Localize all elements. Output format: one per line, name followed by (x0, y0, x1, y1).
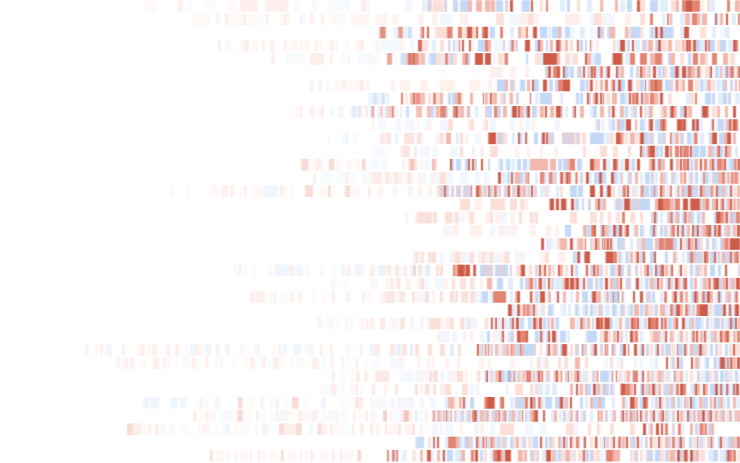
row 31 (143, 397, 740, 409)
row 24 (508, 304, 739, 316)
row 10 (372, 119, 738, 131)
row 14 (313, 172, 739, 184)
row 20 (413, 251, 739, 263)
row 8 (368, 93, 740, 104)
row 4 (218, 40, 738, 52)
row 26 (437, 331, 740, 342)
row 23 (250, 291, 738, 303)
row 17 (405, 212, 740, 223)
row 2 (192, 13, 740, 25)
row 11 (327, 133, 736, 144)
row 25 (318, 318, 740, 329)
row 34 (415, 437, 740, 448)
row 19 (540, 238, 740, 250)
row 5 (271, 53, 735, 65)
row 33 (127, 423, 714, 435)
row 22 (331, 278, 740, 290)
row 18 (443, 225, 740, 237)
row 21 (234, 265, 740, 276)
row 7 (310, 80, 740, 91)
row 27 (85, 344, 740, 356)
row 16 (460, 199, 740, 210)
row 13 (301, 159, 740, 170)
row 32 (193, 410, 740, 422)
row 6 (490, 66, 740, 78)
row 30 (320, 384, 739, 395)
row 9 (295, 106, 736, 118)
row 12 (372, 146, 738, 157)
row 29 (332, 370, 740, 382)
row 3 (379, 27, 730, 38)
row 15 (170, 185, 740, 197)
row 28 (115, 357, 740, 369)
row 1 (145, 0, 740, 12)
row 35 (210, 450, 740, 462)
